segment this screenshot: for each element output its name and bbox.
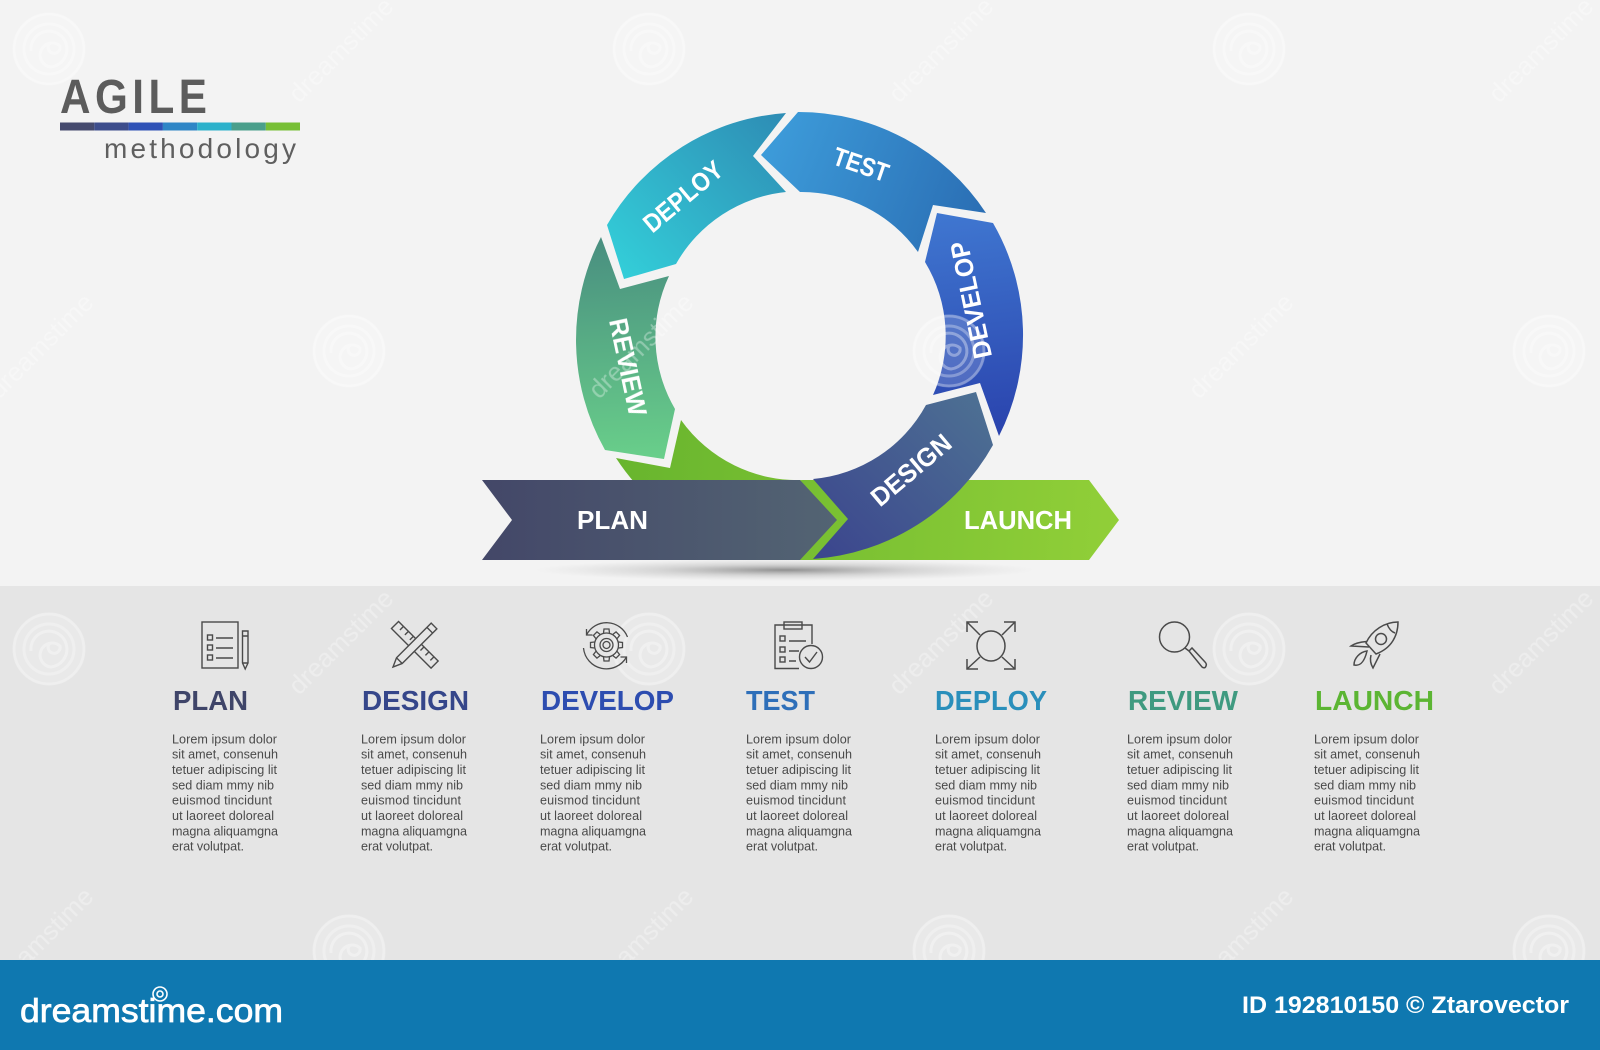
cycle labels [577,141,1072,535]
description: test [746,732,852,854]
step column: launch [1314,622,1434,854]
step column: deploy [935,622,1047,854]
step column: develop [540,623,674,854]
icon: clipboard with check [775,622,822,668]
subtitle: methodology: methodology [104,133,296,164]
description: deploy [935,732,1041,854]
description: test: euismod tincidunt [746,794,846,808]
icon: rocket [1351,622,1398,668]
description: test: ut laoreet doloreal [746,809,848,823]
description: develop [540,732,646,854]
description: develop: euismod tincidunt [540,794,640,808]
shadow under banner [535,559,1035,581]
description: launch: sed diam mmy nib [1314,778,1416,792]
description: deploy: euismod tincidunt [935,794,1036,808]
description: deploy: Lorem ipsum dolor [935,732,1040,746]
description: develop: erat volutpat. [540,840,612,854]
heading: review: REVIEW [1128,685,1239,716]
step column: design [361,621,469,854]
description: design: sed diam mmy nib [361,778,463,792]
description: deploy: ut laoreet doloreal [935,809,1037,823]
step column: review [1127,622,1239,854]
heading: plan: PLAN [173,685,248,716]
label: design: DESIGN [865,428,957,512]
description: develop: Lorem ipsum dolor [540,732,645,746]
title colour bar [60,122,300,130]
heading: test: TEST [746,685,815,716]
watermark spirals and wordmarks: dreamstime [882,583,999,700]
description: test: Lorem ipsum dolor [746,732,851,746]
description: develop: sed diam mmy nib [540,778,642,792]
agile cycle diagram [482,112,1119,560]
segment: plan arrow [482,480,837,560]
description: launch: Lorem ipsum dolor [1314,732,1419,746]
watermark spirals and wordmarks: dreamstime [1182,287,1299,404]
segment: test arrow [761,112,986,252]
watermark spirals and wordmarks: dreamstime [1482,583,1599,700]
description: design: euismod tincidunt [361,794,462,808]
description: test: tetuer adipiscing lit [746,763,852,777]
description: develop: ut laoreet doloreal [540,809,642,823]
footer credit: ID 192810150 © Ztarovector [1242,992,1569,1019]
step column: test [746,622,852,854]
label: launch: LAUNCH [964,505,1072,535]
description: review: erat volutpat. [1127,840,1199,854]
watermark spirals and wordmarks: dreamstime [282,583,399,700]
icon: magnifying glass [1160,622,1206,668]
lower section background [0,586,1600,960]
description: launch [1314,732,1420,854]
title block [60,69,300,164]
heading: deploy: DEPLOY [935,685,1047,716]
description: review: Lorem ipsum dolor [1127,732,1232,746]
label: test: TEST [829,141,893,188]
description: deploy: sed diam mmy nib [935,778,1037,792]
segment: develop arrow [925,213,1023,436]
description: plan: sed diam mmy nib [172,778,274,792]
description: review: sit amet, consenuh [1127,748,1233,762]
description: design [361,732,467,854]
heading: design: DESIGN [362,685,469,716]
footer bar [0,960,1600,1050]
segment: design arrow [813,392,993,559]
description: launch: magna aliquamgna [1314,824,1420,838]
description: deploy: sit amet, consenuh [935,748,1041,762]
label: plan: PLAN [577,505,648,535]
icon: expanding circle [967,622,1015,669]
footer logo: dreamstime.com: dreamstime.com [20,992,283,1029]
icon: gear with arrows [584,623,628,669]
description: review: ut laoreet doloreal [1127,809,1229,823]
heading: develop: DEVELOP [541,685,674,716]
description: review: tetuer adipiscing lit [1127,763,1232,777]
watermark spirals and wordmarks: dreamstime [1182,881,1299,998]
description: deploy: magna aliquamgna [935,824,1041,838]
description: review [1127,732,1233,854]
watermark spirals and wordmarks: dreamstime [582,881,699,998]
description: design: ut laoreet doloreal [361,809,463,823]
heading: launch: LAUNCH [1315,685,1434,716]
description: launch: ut laoreet doloreal [1314,809,1416,823]
label: deploy: DEPLOY [637,154,729,239]
description: design: magna aliquamgna [361,824,467,838]
description: design: tetuer adipiscing lit [361,763,466,777]
segment: review arrow [576,237,675,459]
description: test: erat volutpat. [746,840,818,854]
description: plan: tetuer adipiscing lit [172,763,278,777]
page background top [0,0,1600,586]
label: review: REVIEW [603,315,653,419]
label: develop: DEVELOP [944,239,998,361]
title: AGILE: AGILE [60,69,207,124]
description: launch: tetuer adipiscing lit [1314,763,1420,777]
description: launch: erat volutpat. [1314,840,1386,854]
segment: deploy arrow [607,113,786,279]
description: plan: erat volutpat. [172,840,244,854]
description: review: euismod tincidunt [1127,794,1228,808]
description: design: sit amet, consenuh [361,748,467,762]
description: launch: sit amet, consenuh [1314,748,1420,762]
description: review: magna aliquamgna [1127,824,1233,838]
icon: checklist with pencil [202,622,248,669]
description: develop: tetuer adipiscing lit [540,763,646,777]
description: deploy: erat volutpat. [935,840,1007,854]
description: launch: euismod tincidunt [1314,794,1414,808]
step column: plan [172,622,278,854]
description: test: sed diam mmy nib [746,778,848,792]
description: develop: sit amet, consenuh [540,748,646,762]
description: test: magna aliquamgna [746,824,852,838]
description: develop: magna aliquamgna [540,824,646,838]
segment: launch arrow [616,420,1119,560]
description: plan [172,732,278,854]
description: plan: ut laoreet doloreal [172,809,274,823]
description: plan: Lorem ipsum dolor [172,732,277,746]
description: plan: euismod tincidunt [172,794,272,808]
description: design: erat volutpat. [361,840,433,854]
description: plan: sit amet, consenuh [172,748,278,762]
description: test: sit amet, consenuh [746,748,852,762]
description: review: sed diam mmy nib [1127,778,1229,792]
footer logo spiral [153,987,167,1001]
icon: ruler and pencil [390,621,438,670]
description: deploy: tetuer adipiscing lit [935,763,1040,777]
description: design: Lorem ipsum dolor [361,732,466,746]
description: plan: magna aliquamgna [172,824,278,838]
watermark spirals and wordmarks: dreamstime [582,287,699,404]
